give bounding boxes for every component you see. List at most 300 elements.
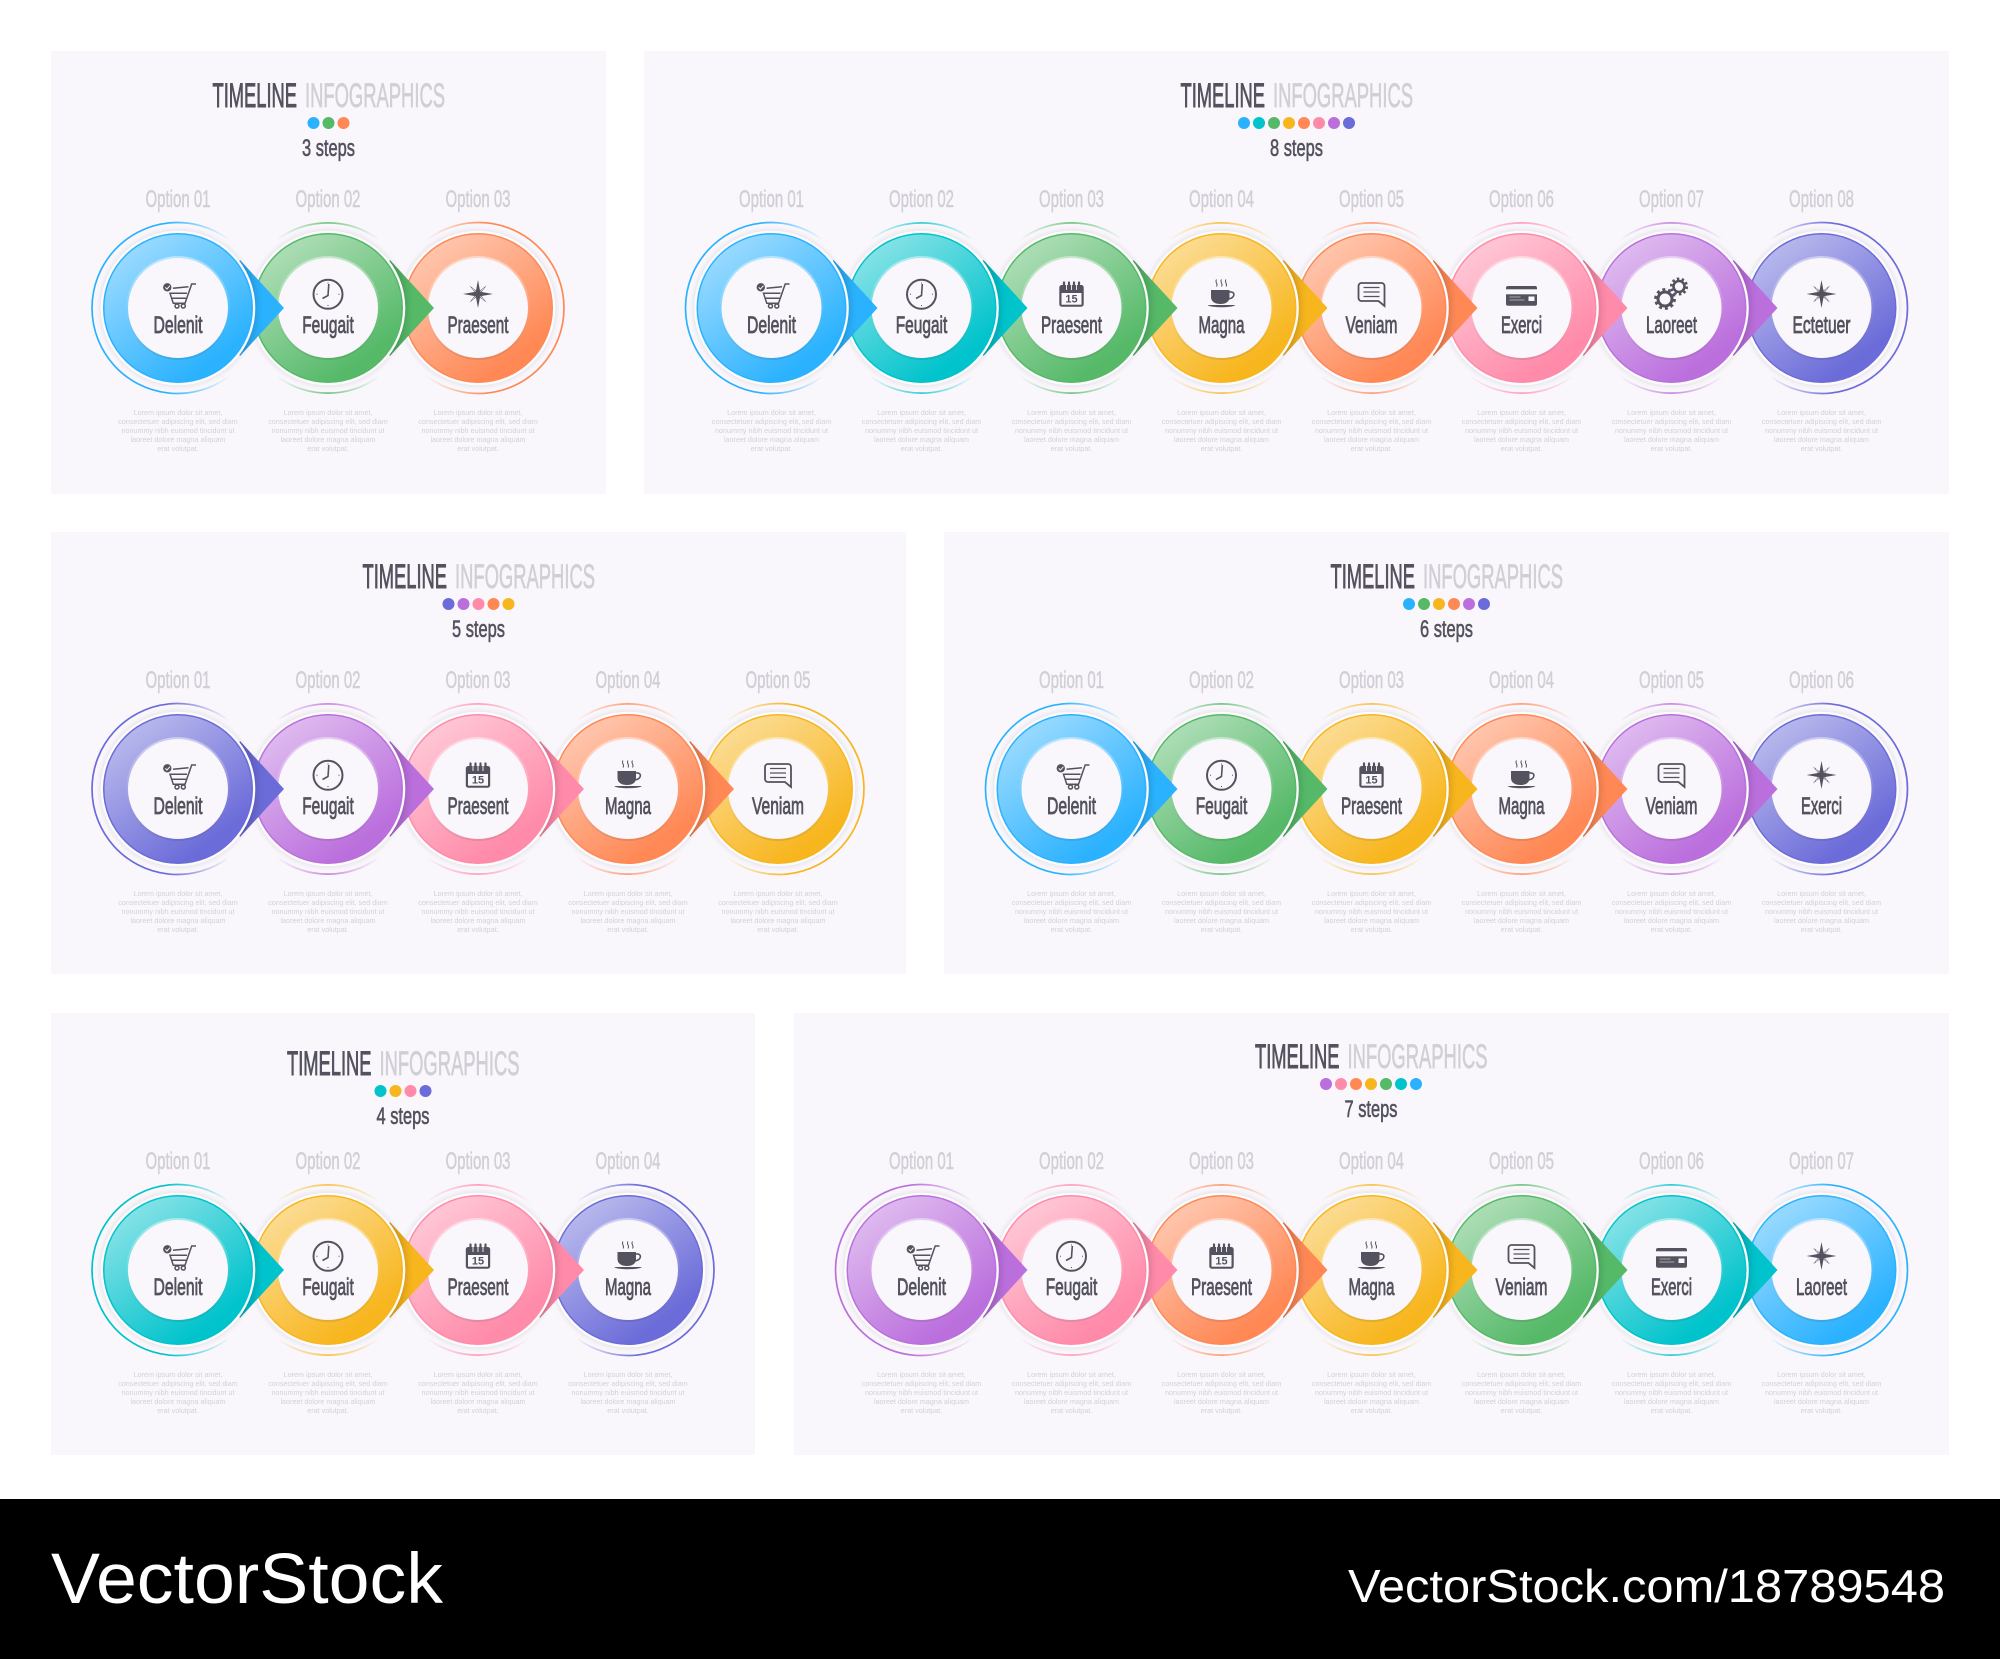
step 4: Magna: consectetuer adipiscing elit, sed diam (1462, 898, 1581, 907)
step 4: Magna (1142, 186, 1328, 453)
step 2: Feugait: nonummy nibh euismod tincidunt ut (271, 907, 385, 916)
step 3: Praesent (1292, 667, 1478, 934)
step 2: Feugait: Option 02 (1189, 667, 1254, 694)
step 3: Praesent: Option 03 (446, 667, 510, 694)
step 5: Veniam: nonummy nibh euismod tincidunt ut (721, 907, 835, 916)
step 5: Veniam: Option 05 (1489, 1148, 1554, 1175)
heading: 6 steps: INFOGRAPHICS (1423, 558, 1563, 596)
heading: 4 steps: 4 steps (376, 1103, 430, 1130)
step 3: Praesent: nonummy nibh euismod tincidunt ut (421, 426, 535, 435)
step 7: Laoreet (1592, 186, 1778, 453)
step 5: Veniam: laoreet dolore magna aliquam (1324, 435, 1419, 444)
step 4: Magna: Option 04 (1489, 667, 1554, 694)
step 1: Delenit: consectetuer adipiscing elit, sed diam (712, 417, 831, 426)
step 7: Laoreet: Option 07 (1639, 186, 1704, 213)
step 2: Feugait (249, 186, 434, 453)
panel: 6 steps (944, 532, 1949, 974)
step 1: Delenit: Option 01 (146, 186, 210, 213)
step 5: Veniam: Lorem ipsum dolor sit amet, (1627, 889, 1716, 898)
step 3: Praesent: 15 (472, 1256, 484, 1268)
step 4: Magna (1292, 1148, 1478, 1415)
heading: 3 steps: TIMELINE (212, 77, 297, 115)
step 3: Praesent: laoreet dolore magna aliquam (430, 916, 526, 925)
step 3: Praesent: erat volutpat. (457, 444, 499, 453)
step 1: Delenit: Lorem ipsum dolor sit amet, (134, 1370, 222, 1379)
step 3: Praesent: erat volutpat. (457, 925, 499, 934)
step 2: Feugait: Lorem ipsum dolor sit amet, (1177, 889, 1266, 898)
heading: 3 steps: 3 steps (302, 135, 355, 162)
step 2: Feugait: Feugait (1046, 1274, 1097, 1301)
step 2: Feugait: Feugait (302, 1274, 354, 1301)
step 5: Veniam: Option 05 (1339, 186, 1404, 213)
step 1: Delenit: erat volutpat. (157, 444, 199, 453)
step 8: Ectetuer (1742, 186, 1907, 453)
step 3: Praesent: laoreet dolore magna aliquam (430, 1397, 526, 1406)
step 4: Magna: erat volutpat. (1351, 1406, 1392, 1415)
step 2: Feugait: Feugait (1196, 793, 1247, 820)
step 7: Laoreet: Lorem ipsum dolor sit amet, (1627, 408, 1716, 417)
step 6: Exerci: laoreet dolore magna aliquam (1624, 1397, 1719, 1406)
step 4: Magna: laoreet dolore magna aliquam (1474, 916, 1569, 925)
step 7: Laoreet: Laoreet (1646, 312, 1697, 339)
step 2: Feugait: erat volutpat. (307, 925, 349, 934)
heading: 8 steps: 8 steps (1270, 135, 1323, 162)
step 3: Praesent: laoreet dolore magna aliquam (1024, 435, 1119, 444)
step 3: Praesent: consectetuer adipiscing elit, sed diam (418, 1379, 538, 1388)
step 2: Feugait: Feugait (302, 312, 354, 339)
step 2: Feugait: erat volutpat. (901, 444, 942, 453)
step 7: Laoreet: Laoreet (1796, 1274, 1847, 1301)
step 6: Exerci: erat volutpat. (1501, 444, 1542, 453)
step 2: Feugait: Option 02 (1039, 1148, 1104, 1175)
step 1: Delenit: Delenit (154, 1274, 203, 1301)
step 3: Praesent: 15 (1065, 294, 1078, 306)
step 2: Feugait: nonummy nibh euismod tincidunt ut (271, 1388, 385, 1397)
step 3: Praesent: Option 03 (1189, 1148, 1254, 1175)
step 3: Praesent: Lorem ipsum dolor sit amet, (434, 408, 522, 417)
step 3: Praesent: Lorem ipsum dolor sit amet, (434, 1370, 522, 1379)
step 2: Feugait: laoreet dolore magna aliquam (1174, 916, 1269, 925)
panel: 8 steps (644, 51, 1949, 494)
step 2: Feugait: consectetuer adipiscing elit, sed diam (1012, 1379, 1131, 1388)
step 2: Feugait: erat volutpat. (307, 1406, 349, 1415)
step 7: Laoreet: nonummy nibh euismod tincidunt ut (1615, 426, 1728, 435)
heading: 5 steps: TIMELINE (362, 558, 447, 596)
step 3: Praesent: Lorem ipsum dolor sit amet, (1327, 889, 1416, 898)
step 4: Magna: consectetuer adipiscing elit, sed diam (568, 1379, 688, 1388)
step 8: Ectetuer: consectetuer adipiscing elit, sed diam (1762, 417, 1881, 426)
step 2: Feugait: Lorem ipsum dolor sit amet, (284, 889, 372, 898)
step 4: Magna: nonummy nibh euismod tincidunt ut (571, 1388, 685, 1397)
step 1: Delenit: consectetuer adipiscing elit, sed diam (118, 1379, 238, 1388)
step 1: Delenit: laoreet dolore magna aliquam (130, 435, 226, 444)
step 2: Feugait: Option 02 (296, 667, 360, 694)
step 1: Delenit: erat volutpat. (157, 925, 199, 934)
step 4: Magna: laoreet dolore magna aliquam (580, 916, 676, 925)
step 1: Delenit: Lorem ipsum dolor sit amet, (1027, 889, 1116, 898)
step 3: Praesent: laoreet dolore magna aliquam (1174, 1397, 1269, 1406)
heading: 5 steps: 5 steps (452, 616, 505, 643)
step 8: Ectetuer: laoreet dolore magna aliquam (1774, 435, 1869, 444)
step 3: Praesent (992, 186, 1178, 453)
step 2: Feugait: nonummy nibh euismod tincidunt ut (865, 426, 978, 435)
step 3: Praesent: consectetuer adipiscing elit, sed diam (418, 417, 538, 426)
step 2: Feugait: consectetuer adipiscing elit, sed diam (862, 417, 981, 426)
step 5: Veniam: nonummy nibh euismod tincidunt ut (1615, 907, 1728, 916)
panel: 3 steps (51, 51, 606, 494)
step 5: Veniam: Veniam (1346, 312, 1398, 339)
step 2: Feugait: consectetuer adipiscing elit, sed diam (268, 898, 388, 907)
step 3: Praesent: consectetuer adipiscing elit, sed diam (418, 898, 538, 907)
step 6: Exerci (1442, 186, 1628, 453)
step 3: Praesent: 15 (1215, 1256, 1228, 1268)
step 2: Feugait: Feugait (896, 312, 947, 339)
step 2: Feugait: erat volutpat. (1051, 1406, 1092, 1415)
step 6: Exerci: Exerci (1801, 793, 1842, 820)
step 2: Feugait: erat volutpat. (307, 444, 349, 453)
step 1: Delenit: consectetuer adipiscing elit, sed diam (118, 417, 238, 426)
step 4: Magna: nonummy nibh euismod tincidunt ut (1165, 426, 1278, 435)
step 3: Praesent: nonummy nibh euismod tincidunt ut (421, 907, 535, 916)
step 7: Laoreet: erat volutpat. (1651, 444, 1692, 453)
step 5: Veniam: erat volutpat. (1351, 444, 1392, 453)
step 6: Exerci: nonummy nibh euismod tincidunt ut (1615, 1388, 1728, 1397)
step 3: Praesent: nonummy nibh euismod tincidunt ut (421, 1388, 535, 1397)
step 2: Feugait: nonummy nibh euismod tincidunt ut (271, 426, 385, 435)
step 4: Magna (549, 667, 734, 934)
step 1: Delenit: nonummy nibh euismod tincidunt ut (865, 1388, 978, 1397)
step 6: Exerci (1592, 1148, 1778, 1415)
step 6: Exerci: erat volutpat. (1801, 925, 1842, 934)
step 1: Delenit: nonummy nibh euismod tincidunt ut (121, 1388, 235, 1397)
step 2: Feugait: erat volutpat. (1201, 925, 1242, 934)
step 1: Delenit: nonummy nibh euismod tincidunt ut (121, 907, 235, 916)
step 7: Laoreet: erat volutpat. (1801, 1406, 1842, 1415)
heading: 8 steps: TIMELINE (1180, 77, 1265, 115)
step 1: Delenit: Delenit (154, 793, 203, 820)
step 5: Veniam (699, 667, 864, 934)
step 1: Delenit: laoreet dolore magna aliquam (1024, 916, 1119, 925)
step 5: Veniam (1442, 1148, 1628, 1415)
step 7: Laoreet (1742, 1148, 1907, 1415)
step 3: Praesent: Lorem ipsum dolor sit amet, (434, 889, 522, 898)
step 3: Praesent: erat volutpat. (457, 1406, 499, 1415)
step 8: Ectetuer: Option 08 (1789, 186, 1854, 213)
step 1: Delenit (92, 186, 284, 453)
step 5: Veniam: erat volutpat. (1651, 925, 1692, 934)
step 6: Exerci: laoreet dolore magna aliquam (1774, 916, 1869, 925)
step 4: Magna: Option 04 (1339, 1148, 1404, 1175)
step 8: Ectetuer: erat volutpat. (1801, 444, 1842, 453)
step 2: Feugait: consectetuer adipiscing elit, sed diam (268, 417, 388, 426)
step 6: Exerci: Lorem ipsum dolor sit amet, (1777, 889, 1866, 898)
heading: 7 steps: TIMELINE (1255, 1038, 1340, 1076)
step 6: Exerci (1742, 667, 1907, 934)
step 3: Praesent: Option 03 (446, 186, 510, 213)
step 1: Delenit: erat volutpat. (157, 1406, 199, 1415)
step 1: Delenit (92, 667, 284, 934)
heading: 3 steps: INFOGRAPHICS (305, 77, 445, 115)
step 1: Delenit (686, 186, 878, 453)
step 2: Feugait: nonummy nibh euismod tincidunt ut (1165, 907, 1278, 916)
step 4: Magna: Magna (1498, 793, 1545, 820)
step 2: Feugait: laoreet dolore magna aliquam (280, 435, 376, 444)
step 5: Veniam: Lorem ipsum dolor sit amet, (1477, 1370, 1566, 1379)
step 4: Magna (549, 1148, 714, 1415)
step 3: Praesent: Praesent (448, 1274, 509, 1301)
step 4: Magna (1442, 667, 1628, 934)
step 4: Magna: Option 04 (596, 667, 660, 694)
step 2: Feugait (842, 186, 1028, 453)
step 5: Veniam: Veniam (1496, 1274, 1548, 1301)
panel: 7 steps (794, 1013, 1949, 1455)
step 5: Veniam: Lorem ipsum dolor sit amet, (1327, 408, 1416, 417)
step 5: Veniam: laoreet dolore magna aliquam (730, 916, 826, 925)
step 2: Feugait (249, 1148, 434, 1415)
step 5: Veniam: consectetuer adipiscing elit, sed diam (1612, 898, 1731, 907)
step 6: Exerci: Option 06 (1489, 186, 1554, 213)
step 6: Exerci: Option 06 (1639, 1148, 1704, 1175)
step 1: Delenit: Lorem ipsum dolor sit amet, (134, 889, 222, 898)
step 8: Ectetuer: Ectetuer (1792, 312, 1850, 339)
step 4: Magna: Lorem ipsum dolor sit amet, (1177, 408, 1266, 417)
step 5: Veniam: consectetuer adipiscing elit, sed diam (718, 898, 838, 907)
heading: 8 steps (1180, 77, 1413, 162)
heading: 4 steps (287, 1045, 520, 1130)
step 4: Magna: consectetuer adipiscing elit, sed diam (568, 898, 688, 907)
heading: 3 steps (212, 77, 445, 162)
step 5: Veniam: nonummy nibh euismod tincidunt ut (1465, 1388, 1578, 1397)
step 1: Delenit: Option 01 (1039, 667, 1104, 694)
step 1: Delenit: consectetuer adipiscing elit, sed diam (862, 1379, 981, 1388)
step 2: Feugait: laoreet dolore magna aliquam (874, 435, 969, 444)
step 1: Delenit: Option 01 (146, 1148, 210, 1175)
step 2: Feugait (249, 667, 434, 934)
heading: 6 steps (1330, 558, 1563, 643)
step 6: Exerci: consectetuer adipiscing elit, sed diam (1462, 417, 1581, 426)
step 4: Magna: erat volutpat. (607, 1406, 649, 1415)
step 3: Praesent: erat volutpat. (1351, 925, 1392, 934)
step 3: Praesent (1142, 1148, 1328, 1415)
step 3: Praesent: consectetuer adipiscing elit, sed diam (1312, 898, 1431, 907)
step 2: Feugait: laoreet dolore magna aliquam (280, 1397, 376, 1406)
step 2: Feugait: Option 02 (889, 186, 954, 213)
step 3: Praesent: Praesent (1341, 793, 1402, 820)
step 4: Magna: Lorem ipsum dolor sit amet, (1327, 1370, 1416, 1379)
step 1: Delenit: nonummy nibh euismod tincidunt ut (121, 426, 235, 435)
step 6: Exerci: Lorem ipsum dolor sit amet, (1477, 408, 1566, 417)
step 5: Veniam: nonummy nibh euismod tincidunt ut (1315, 426, 1428, 435)
step 2: Feugait: Lorem ipsum dolor sit amet, (1027, 1370, 1116, 1379)
step 4: Magna: laoreet dolore magna aliquam (580, 1397, 676, 1406)
step 5: Veniam: consectetuer adipiscing elit, sed diam (1462, 1379, 1581, 1388)
step 3: Praesent: laoreet dolore magna aliquam (430, 435, 526, 444)
step 3: Praesent: Praesent (1041, 312, 1102, 339)
step 5: Veniam: consectetuer adipiscing elit, sed diam (1312, 417, 1431, 426)
step 5: Veniam: erat volutpat. (757, 925, 799, 934)
step 4: Magna: erat volutpat. (1201, 444, 1242, 453)
step 6: Exerci: consectetuer adipiscing elit, sed diam (1612, 1379, 1731, 1388)
step 7: Laoreet: consectetuer adipiscing elit, sed diam (1612, 417, 1731, 426)
heading: 6 steps: 6 steps (1420, 616, 1473, 643)
step 4: Magna: Lorem ipsum dolor sit amet, (584, 1370, 672, 1379)
step 3: Praesent: consectetuer adipiscing elit, sed diam (1012, 417, 1131, 426)
heading: 7 steps (1255, 1038, 1488, 1123)
step 3: Praesent: Praesent (448, 312, 509, 339)
step 7: Laoreet: laoreet dolore magna aliquam (1624, 435, 1719, 444)
step 3: Praesent: Praesent (1191, 1274, 1252, 1301)
step 7: Laoreet: consectetuer adipiscing elit, sed diam (1762, 1379, 1881, 1388)
step 1: Delenit: nonummy nibh euismod tincidunt ut (715, 426, 828, 435)
step 5: Veniam: erat volutpat. (1501, 1406, 1542, 1415)
step 1: Delenit: Delenit (747, 312, 796, 339)
step 1: Delenit: erat volutpat. (1051, 925, 1092, 934)
step 3: Praesent (399, 1148, 584, 1415)
step 1: Delenit: consectetuer adipiscing elit, sed diam (118, 898, 238, 907)
step 2: Feugait: Feugait (302, 793, 354, 820)
step 2: Feugait (992, 1148, 1178, 1415)
step 6: Exerci: nonummy nibh euismod tincidunt ut (1765, 907, 1878, 916)
step 1: Delenit: Lorem ipsum dolor sit amet, (877, 1370, 966, 1379)
footer bar (0, 1499, 2000, 1659)
step 5: Veniam: Veniam (1646, 793, 1698, 820)
step 8: Ectetuer: nonummy nibh euismod tincidunt ut (1765, 426, 1878, 435)
step 3: Praesent: consectetuer adipiscing elit, sed diam (1162, 1379, 1281, 1388)
step 6: Exerci: Lorem ipsum dolor sit amet, (1627, 1370, 1716, 1379)
step 2: Feugait: Lorem ipsum dolor sit amet, (877, 408, 966, 417)
step 4: Magna: nonummy nibh euismod tincidunt ut (571, 907, 685, 916)
step 1: Delenit: erat volutpat. (751, 444, 792, 453)
step 4: Magna: consectetuer adipiscing elit, sed diam (1312, 1379, 1431, 1388)
step 5: Veniam: Lorem ipsum dolor sit amet, (734, 889, 822, 898)
step 4: Magna: Lorem ipsum dolor sit amet, (1477, 889, 1566, 898)
step 1: Delenit: laoreet dolore magna aliquam (130, 916, 226, 925)
step 2: Feugait (1142, 667, 1328, 934)
step 3: Praesent: nonummy nibh euismod tincidunt ut (1015, 426, 1128, 435)
step 2: Feugait: Option 02 (296, 1148, 360, 1175)
step 3: Praesent: Lorem ipsum dolor sit amet, (1177, 1370, 1266, 1379)
heading: 4 steps: TIMELINE (287, 1045, 372, 1083)
step 3: Praesent: Option 03 (1339, 667, 1404, 694)
step 2: Feugait: Lorem ipsum dolor sit amet, (284, 408, 372, 417)
step 2: Feugait: Option 02 (296, 186, 360, 213)
step 3: Praesent: 15 (472, 774, 484, 786)
step 6: Exerci: Option 06 (1789, 667, 1854, 694)
step 1: Delenit: erat volutpat. (901, 1406, 942, 1415)
step 3: Praesent: 15 (1365, 774, 1378, 786)
step 2: Feugait: laoreet dolore magna aliquam (1024, 1397, 1119, 1406)
step 3: Praesent: laoreet dolore magna aliquam (1324, 916, 1419, 925)
step 1: Delenit: Option 01 (146, 667, 210, 694)
step 7: Laoreet: Lorem ipsum dolor sit amet, (1777, 1370, 1866, 1379)
step 3: Praesent (399, 186, 564, 453)
panel: 4 steps (51, 1013, 755, 1455)
step 5: Veniam (1592, 667, 1778, 934)
step 3: Praesent (399, 667, 584, 934)
step 2: Feugait: consectetuer adipiscing elit, sed diam (268, 1379, 388, 1388)
step 8: Ectetuer: Lorem ipsum dolor sit amet, (1777, 408, 1866, 417)
step 3: Praesent: nonummy nibh euismod tincidunt ut (1315, 907, 1428, 916)
step 4: Magna: Option 04 (1189, 186, 1254, 213)
step 1: Delenit: Delenit (1047, 793, 1096, 820)
step 1: Delenit: Delenit (154, 312, 203, 339)
step 5: Veniam: laoreet dolore magna aliquam (1474, 1397, 1569, 1406)
footer image id: VectorStock.com/18789548 (1348, 1560, 1945, 1612)
step 1: Delenit: nonummy nibh euismod tincidunt ut (1015, 907, 1128, 916)
heading: 8 steps: INFOGRAPHICS (1273, 77, 1413, 115)
step 1: Delenit: Delenit (897, 1274, 946, 1301)
step 1: Delenit: consectetuer adipiscing elit, sed diam (1012, 898, 1131, 907)
step 7: Laoreet: laoreet dolore magna aliquam (1774, 1397, 1869, 1406)
panel: 5 steps (51, 532, 906, 974)
step 5: Veniam: Option 05 (1639, 667, 1704, 694)
step 4: Magna: Lorem ipsum dolor sit amet, (584, 889, 672, 898)
step 1: Delenit: laoreet dolore magna aliquam (874, 1397, 969, 1406)
step 2: Feugait: nonummy nibh euismod tincidunt ut (1015, 1388, 1128, 1397)
step 3: Praesent: erat volutpat. (1051, 444, 1092, 453)
step 1: Delenit: Lorem ipsum dolor sit amet, (727, 408, 816, 417)
step 3: Praesent: Praesent (448, 793, 509, 820)
step 3: Praesent: Option 03 (1039, 186, 1104, 213)
heading: 4 steps: INFOGRAPHICS (380, 1045, 520, 1083)
heading: 5 steps: INFOGRAPHICS (455, 558, 595, 596)
step 3: Praesent: erat volutpat. (1201, 1406, 1242, 1415)
step 1: Delenit: laoreet dolore magna aliquam (724, 435, 819, 444)
step 4: Magna: nonummy nibh euismod tincidunt ut (1465, 907, 1578, 916)
step 1: Delenit: laoreet dolore magna aliquam (130, 1397, 226, 1406)
step 3: Praesent: Option 03 (446, 1148, 510, 1175)
step 4: Magna: erat volutpat. (607, 925, 649, 934)
step 6: Exerci: erat volutpat. (1651, 1406, 1692, 1415)
step 7: Laoreet: Option 07 (1789, 1148, 1854, 1175)
step 1: Delenit: Option 01 (739, 186, 804, 213)
step 4: Magna: Magna (605, 1274, 651, 1301)
step 4: Magna: Magna (1198, 312, 1245, 339)
step 1: Delenit: Lorem ipsum dolor sit amet, (134, 408, 222, 417)
step 4: Magna: Option 04 (596, 1148, 660, 1175)
heading: 5 steps (362, 558, 595, 643)
step 5: Veniam: Option 05 (746, 667, 810, 694)
step 7: Laoreet: nonummy nibh euismod tincidunt ut (1765, 1388, 1878, 1397)
step 4: Magna: Magna (1348, 1274, 1395, 1301)
step 4: Magna: Magna (605, 793, 651, 820)
step 4: Magna: erat volutpat. (1501, 925, 1542, 934)
footer logo: VectorStock (51, 1540, 444, 1619)
heading: 7 steps: 7 steps (1344, 1096, 1398, 1123)
heading: 6 steps: TIMELINE (1330, 558, 1415, 596)
step 2: Feugait: Lorem ipsum dolor sit amet, (284, 1370, 372, 1379)
step 1: Delenit (92, 1148, 284, 1415)
step 5: Veniam (1292, 186, 1478, 453)
step 6: Exerci: consectetuer adipiscing elit, sed diam (1762, 898, 1881, 907)
step 6: Exerci: laoreet dolore magna aliquam (1474, 435, 1569, 444)
step 5: Veniam: Veniam (752, 793, 804, 820)
step 6: Exerci: nonummy nibh euismod tincidunt ut (1465, 426, 1578, 435)
step 1: Delenit (836, 1148, 1028, 1415)
step 4: Magna: nonummy nibh euismod tincidunt ut (1315, 1388, 1428, 1397)
step 6: Exerci: Exerci (1651, 1274, 1692, 1301)
step 4: Magna: consectetuer adipiscing elit, sed diam (1162, 417, 1281, 426)
step 6: Exerci: Exerci (1501, 312, 1542, 339)
step 3: Praesent: Lorem ipsum dolor sit amet, (1027, 408, 1116, 417)
step 1: Delenit (986, 667, 1178, 934)
step 4: Magna: laoreet dolore magna aliquam (1174, 435, 1269, 444)
step 5: Veniam: laoreet dolore magna aliquam (1624, 916, 1719, 925)
step 1: Delenit: Option 01 (889, 1148, 954, 1175)
heading: 7 steps: INFOGRAPHICS (1348, 1038, 1488, 1076)
step 2: Feugait: laoreet dolore magna aliquam (280, 916, 376, 925)
step 2: Feugait: consectetuer adipiscing elit, sed diam (1162, 898, 1281, 907)
